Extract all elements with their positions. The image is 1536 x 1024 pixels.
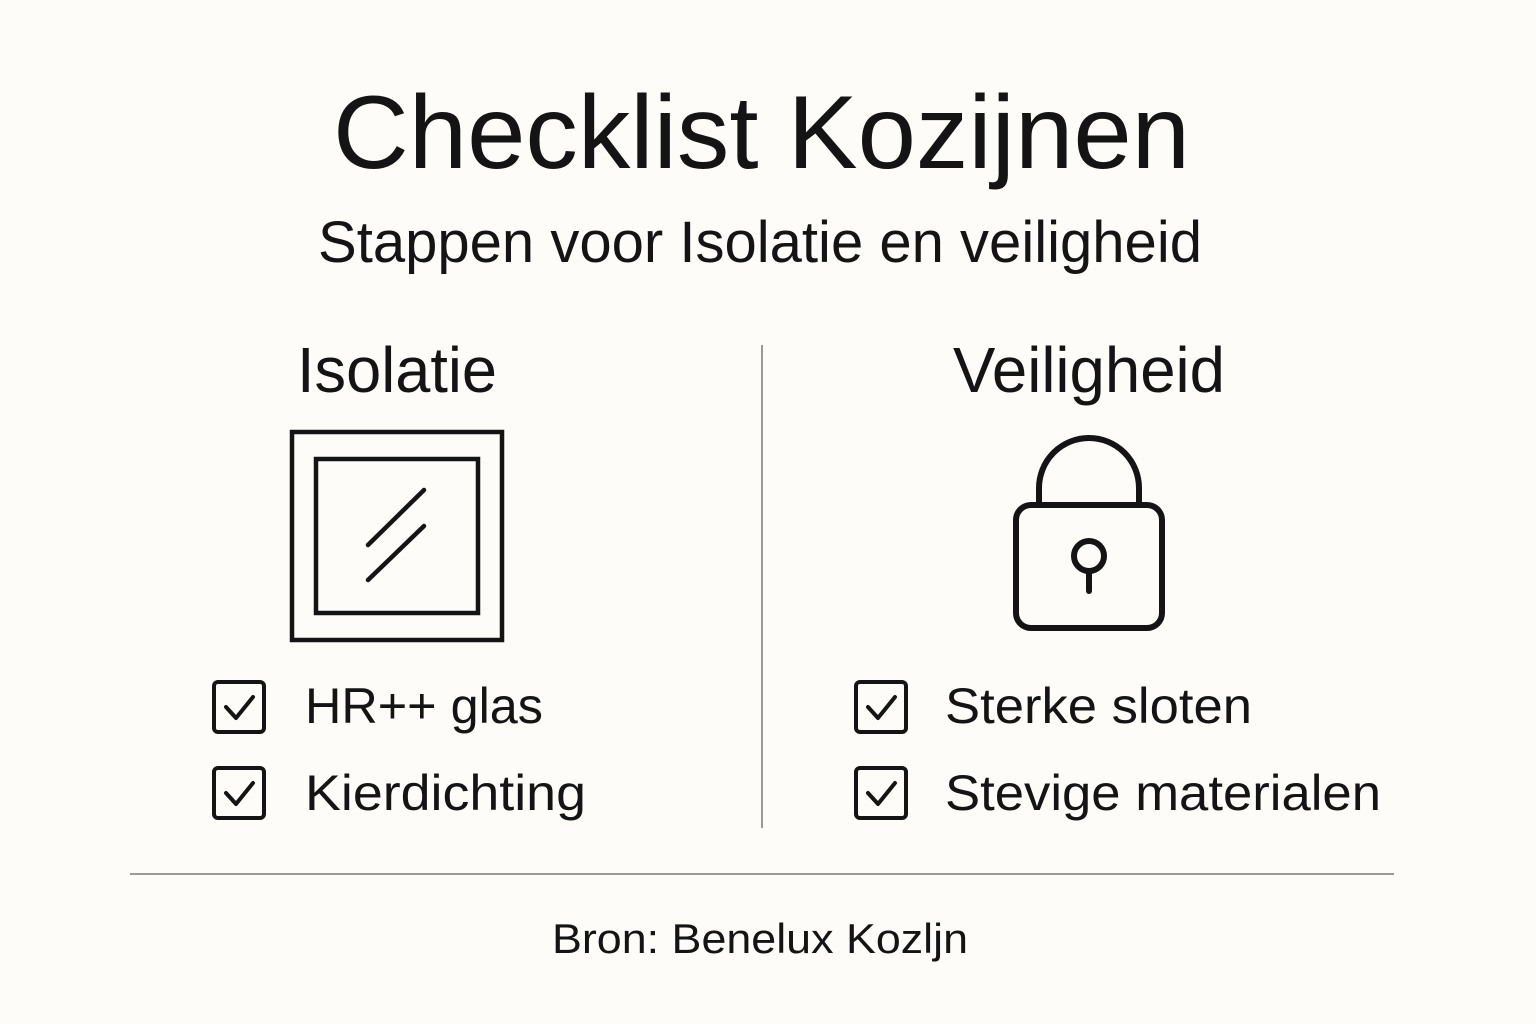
heading: Isolatie: Isolatie	[297, 334, 497, 406]
panel: veiligheid	[856, 334, 1381, 821]
checklist item: HR++ glas: HR++ glas	[305, 678, 543, 734]
checklist item: Sterke sloten: Sterke sloten	[945, 678, 1252, 734]
icon: window	[292, 432, 502, 640]
footer source: Bron: Benelux Kozljn	[552, 915, 968, 962]
heading: Veiligheid: Veiligheid	[953, 334, 1225, 406]
title: Checklist Kozijnen	[333, 75, 1190, 191]
icon: lock	[1016, 438, 1162, 628]
panel: isolatie	[214, 334, 586, 821]
checklist item: Kierdichting: Kierdichting	[305, 765, 586, 821]
subtitle: Stappen voor Isolatie en veiligheid	[318, 210, 1202, 275]
checklist item: Stevige materialen: Stevige materialen	[945, 765, 1381, 821]
